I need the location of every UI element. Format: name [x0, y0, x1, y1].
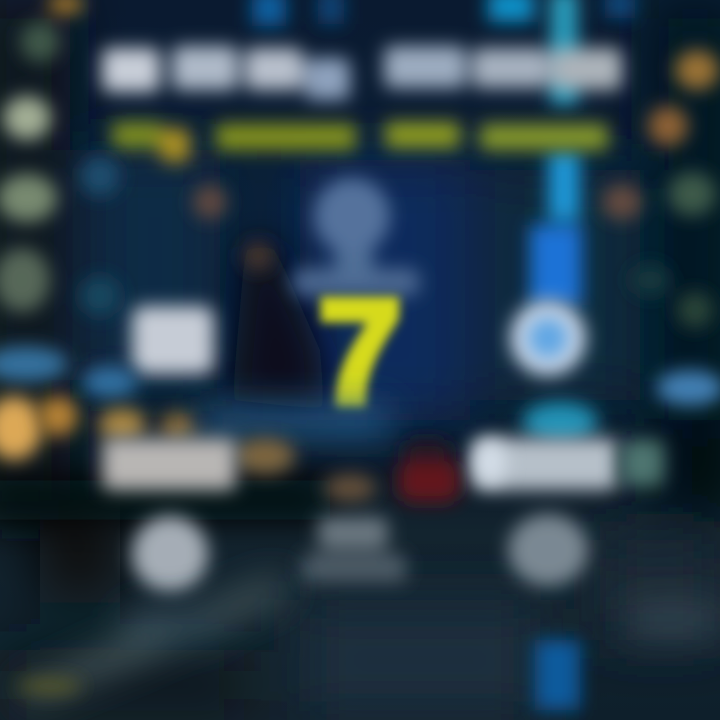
left side windows: [0, 0, 273, 316]
left lower panel: [102, 438, 236, 490]
right icon: glowing circle: [510, 300, 586, 376]
light beams: top blue streaks: [252, 0, 635, 710]
icon: central figure: [292, 178, 420, 296]
bottom row: right circle: [508, 514, 588, 586]
left blue and orange lights: [0, 346, 390, 502]
right side windows: [602, 50, 720, 406]
big number 7: 7: [319, 270, 401, 435]
bottom row: centre block: [302, 517, 406, 582]
subtitle: yellow band: [112, 122, 608, 162]
right lower panel: [472, 402, 664, 490]
bottom row: left circle: [132, 516, 208, 592]
road streaks: [15, 575, 720, 705]
red car: [398, 440, 460, 502]
title: top line: [102, 46, 622, 100]
left panel: white box: [132, 306, 214, 374]
road glow: yellow streak: [18, 678, 82, 694]
